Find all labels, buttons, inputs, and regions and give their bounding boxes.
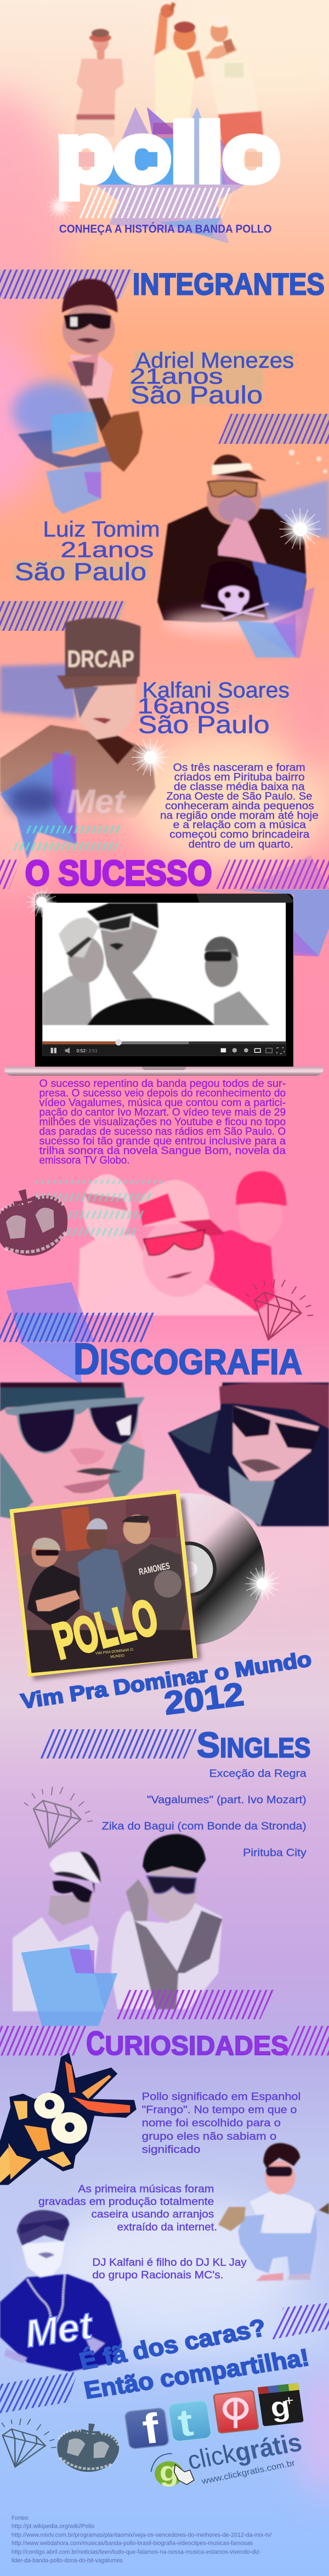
player controls: / 2:51 [86,1048,98,1053]
text: Adriel Menezes: Adriel Menezes [135,349,294,373]
logo: clickgrátis: clickgrátis [185,2428,304,2475]
photo: crouching singer [218,2143,329,2281]
logo: clickgrátis: www.clickgratis.com.br [200,2458,296,2486]
text: album year: 2012 [162,1675,246,1722]
icon: crown [0,1181,76,1264]
icon: google plus: + [283,2392,295,2409]
photo: DJ Kalfani with Meti shirt [0,2210,122,2372]
text block: DJ Kalfani: do grupo Racionais MC's. [92,2270,224,2281]
text block: significado: significado [142,2144,200,2156]
ghost stripes over trio [22,1180,163,1236]
photo: Luiz Tomim [157,455,329,658]
stripes: left [0,601,127,631]
icon: crown [54,2420,123,2476]
logo: clickgrátis [151,2428,304,2487]
text block: significado: Pollo significado em Espanhol [142,2091,300,2103]
stripes: upper right [273,2303,329,2339]
heading: Singles: S [197,1725,220,1765]
album tagline on cover: VIM PRA DOMINAR O [95,1648,134,1656]
photo: face with grey sunglasses [0,1382,145,1519]
text block: significado: grupo eles não sabiam o [142,2131,276,2142]
text block: o sucesso: presa. O sucesso veio depois do reconhecimento do [39,1088,286,1099]
text block: primeiras músicas [38,2184,217,2233]
text block: o sucesso: pação do cantor Ivo Mozart. O vídeo teve mais de 29 [39,1107,286,1118]
text: Luiz Tomim: Luiz Tomim [43,517,160,542]
text block: o sucesso: emissora TV Globo. [39,1155,129,1166]
album title: POLLO [48,1589,163,1670]
stripes: o sucesso [0,855,329,889]
laptop bezel [35,893,293,1067]
triangles behind laptop [235,890,329,956]
photo: confetti specks [289,449,327,474]
text block: origem da banda: de classe média baixa na [174,781,305,793]
album cover: RAMONES [138,1560,171,1577]
text block: o sucesso: das paradas de sucesso nas rádios em São Paulo. O [39,1126,286,1138]
text block: origem da banda: na região onde moram até hoje [160,810,319,822]
list: singles [102,1768,307,1859]
text block: origem da banda: e a relação com a música [173,819,306,831]
text block: significado [142,2091,300,2156]
icon: twitter [168,2399,212,2446]
stripes: below trio [0,1313,155,1342]
triangles: blue, lower left [21,1944,117,2026]
player controls: 0:52 [77,1048,86,1053]
text block: sources: http://pt.wikipedia.org/wiki/Pollo [12,2522,95,2529]
text block: o sucesso: vídeo Vagalumes, música que contou com a partici- [39,1097,286,1109]
screen white [42,903,286,1056]
text: Kalfani Soares: 16anos [138,694,230,718]
photo: two singers [13,1834,223,2011]
stripes: singles [38,1729,197,1759]
photo: DJ Kalfani with Meti shirt: Met [22,2304,97,2356]
section: call to action [0,2303,329,2564]
stripes: integrantes [0,270,134,299]
laptop notch [141,1067,186,1070]
bezel highlight [196,893,293,903]
list: singles: Pirituba City [243,1847,307,1859]
text block: sources: http://contigo.abril.com.br/noticias/teen/tudo-que-falamos-na-nossa-musica-estamos-vivendo-diz- [12,2548,261,2555]
photo: three band members [75,2,263,149]
laptop with video player [4,887,323,1076]
heading: Discografia: D [73,1335,100,1384]
text: Luiz Tomim: São Paulo [15,557,146,585]
photo: pink duotone trio [78,1171,286,1315]
album cover [8,1490,201,1683]
text: Adriel Menezes [129,349,294,409]
text: Kalfani Soares [138,679,290,739]
text block: origem da banda: conheceram ainda pequenos [165,800,314,812]
icon: google plus: g [269,2391,292,2423]
list: singles: Exceção da Regra [209,1768,307,1780]
glow at logo corner [47,193,73,220]
text block: primeiras músicas: gravadas em produção totalmente [38,2196,214,2208]
laptop base [4,1067,323,1076]
text block: o sucesso: O sucesso repentino da banda pegou todos de sur- [39,1078,286,1090]
section: album info and singles [13,1648,313,2026]
text block: significado: nome foi escolhido para o [142,2118,281,2129]
text block: sources: Fontes: [12,2514,30,2521]
text block: o sucesso: sucesso foi tão grande que entrou inclusive para a [39,1136,286,1147]
text: Kalfani Soares: São Paulo [138,711,270,739]
heading: Discografia: ISCOGRAFIA [100,1342,302,1382]
heading: Curiosidades: C [86,2025,105,2062]
icon: twitter: t [175,2401,196,2444]
stripes: upper [115,1990,274,2019]
text block: DJ Kalfani: DJ Kalfani é filho do DJ KL Jay [92,2257,247,2269]
text block: origem da banda [160,762,319,850]
stripes under logo [76,187,235,218]
text block: o sucesso [39,1078,286,1166]
logo: Pollo: pollo [56,107,280,198]
stripes: heading left [0,2026,89,2055]
icon: google plus [258,2383,304,2426]
photo: Kalfani Soares: DRCAP [67,646,134,673]
album tagline on cover [95,1648,134,1659]
triangle behind heading [19,1342,82,1384]
heading: Curiosidades: URIOSIDADES [105,2031,288,2061]
text block: primeiras músicas: extraído da internet. [117,2222,217,2233]
player controls [51,1047,284,1053]
section: curiosidades [0,1990,329,2372]
stripes: heading right [284,2026,329,2055]
text block: sources [12,2514,272,2564]
photo: face with hood and jacket [168,1382,329,1526]
section: hero [0,2,325,301]
icon: facebook: f [140,2405,162,2453]
icon: pinterest [213,2390,258,2433]
icon: diamond [243,1278,315,1342]
text block: origem da banda: Zona Oeste de São Paulo. Se [166,791,312,802]
text: Kalfani Soares: Kalfani Soares [142,679,290,703]
text block: o sucesso: milhões de visualizações no Youtube e ficou no topo [39,1116,286,1128]
text block: origem da banda: dentro de um quarto. [189,839,293,850]
album tagline on cover: MUNDO [110,1654,125,1659]
ghost stripes near Kalfani [14,825,122,851]
triangles behind logo [95,107,246,243]
stripes: left [0,2372,78,2413]
text block: origem da banda: criados em Pirituba bairro [174,772,305,783]
logo: clickgrátis: g [160,2457,179,2487]
heading: O Sucesso: O SUCESSO [25,853,212,893]
flare on CD [245,1567,279,1601]
stripes: top right [218,414,329,444]
player bar [42,1041,286,1056]
text block: significado: "Frango". No tempo em que o [142,2105,297,2116]
photo: Kalfani Soares: Met [67,783,126,820]
text block: primeiras músicas: As primeira músicas foram [78,2184,214,2195]
text: album name: Vim Pra Dominar o Mundo [19,1648,313,1713]
icon: diamond [24,1787,93,1848]
photo: Kalfani Soares [0,618,169,859]
photo: Adriel Menezes [13,279,143,514]
list: singles: Zika do Bagui (com Bonde da Stronda) [102,1821,307,1832]
text block: origem da banda: começou como brincadeira [169,829,310,841]
text: Adriel Menezes: São Paulo [131,381,263,409]
list: singles: "Vagalumes" (part. Ivo Mozart) [147,1794,307,1806]
text: fan question: É fã dos caras? [77,2313,269,2375]
progress bar [42,1039,286,1046]
subtitle: CONHEÇA A HISTÓRIA DA BANDA POLLO [59,222,272,236]
heading: Singles: INGLES [220,1732,310,1763]
text block: sources: http://www.mixtv.com.br/programas/plantaomix/veja-os-vencedores-do-melhores-de-2012-da-mix-tv/ [12,2531,272,2538]
text: share call: Então compartilha! [82,2344,311,2404]
text: Adriel Menezes: 21anos [129,364,223,389]
flare on bezel [26,887,56,917]
video frame: three artists [42,903,270,1025]
text: Luiz Tomim [13,517,160,585]
CD disc [113,1493,265,1645]
text block: origem da banda: Os três nasceram e foram [173,762,305,774]
section: discografia [0,1335,329,1683]
icon: facebook [124,2404,170,2455]
text block: DJ Kalfani [92,2257,247,2281]
text block: sources: lider-da-banda-pollo-dona-do-hit-vagalumes [12,2557,123,2564]
icon: diamond [0,2417,58,2469]
icon: chicken logo [0,2053,137,2185]
text: Luiz Tomim: 21anos [60,538,154,562]
triangles: bottom left [6,1283,94,1342]
text block: o sucesso: trilha sonora da novela Sangue Bom, novela da [39,1145,286,1156]
text block: sources: http://www.webdahora.com/musicas/banda-pollo-brasil-biografia-videoclipes-musicas-famosas [12,2539,253,2546]
text block: primeiras músicas: caseira usando arranjos [91,2209,214,2220]
